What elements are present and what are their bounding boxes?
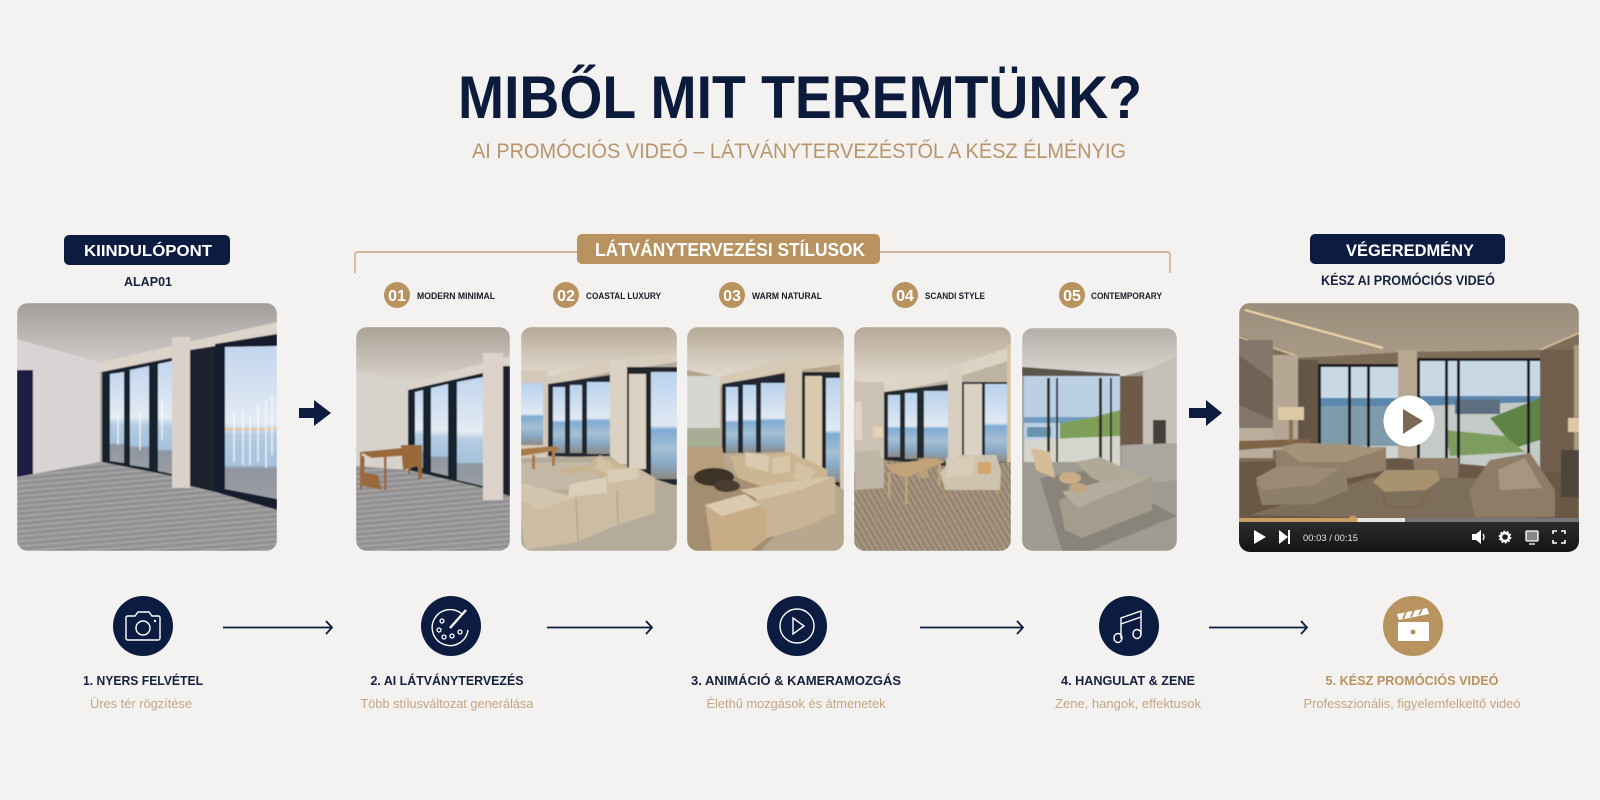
style label 02: 02 (557, 288, 575, 305)
progress bar (1239, 516, 1579, 522)
style label 02 (553, 282, 662, 308)
badge: kiindulópont (64, 235, 230, 265)
style label 04: SCANDI STYLE (925, 291, 985, 302)
title: MIBŐL MIT TEREMTÜNK? (458, 64, 1142, 131)
flow arrow 3 (920, 621, 1023, 634)
step 4 text (1055, 673, 1201, 711)
style label 04: 04 (896, 288, 914, 305)
video player (1239, 303, 1579, 552)
style label 03: 03 (723, 288, 741, 305)
label: alap01: ALAP01 (124, 274, 172, 289)
video frame image (1239, 303, 1579, 523)
style label 05: CONTEMPORARY (1091, 291, 1163, 302)
photo: coastal luxury (521, 327, 677, 551)
step 5 text (1304, 673, 1520, 711)
style label 05: 05 (1063, 288, 1081, 305)
style label 01 (384, 282, 495, 308)
step 2 text (360, 673, 534, 711)
style label 04 (892, 282, 985, 308)
badge: látványtervezési stílusok (577, 234, 880, 264)
photo: raw empty room (17, 303, 277, 551)
step 1 text: 1. NYERS FELVÉTEL (83, 673, 203, 688)
step 5 icon: clapperboard (1383, 596, 1443, 656)
step 5 text: 5. KÉSZ PROMÓCIÓS VIDEÓ (1326, 673, 1498, 688)
style label 02: COASTAL LUXURY (586, 291, 662, 302)
control bar (1239, 522, 1579, 552)
step 4 text: 4. HANGULAT & ZENE (1061, 673, 1195, 688)
play button (1384, 396, 1434, 446)
step 1 text: Üres tér rögzítése (90, 696, 192, 711)
step 3 text: 3. ANIMÁCIÓ & KAMERAMOZGÁS (691, 673, 901, 688)
arrow: styles to result (1189, 400, 1222, 426)
step 3 text: Élethű mozgások és átmenetek (706, 696, 886, 711)
step 5 text: Professzionális, figyelemfelkeltő videó (1304, 696, 1520, 711)
badge: látványtervezési stílusok: LÁTVÁNYTERVEZÉSI STÍLUSOK (595, 239, 866, 260)
badge: kiindulópont: KIINDULÓPONT (84, 242, 213, 260)
bracket: style group (355, 252, 1170, 273)
arrow: start to styles (299, 400, 331, 426)
step 4 icon: music note (1099, 596, 1159, 656)
step 1 text (83, 673, 203, 711)
label: kész ai promóciós videó: KÉSZ AI PROMÓCIÓS VIDEÓ (1321, 273, 1495, 288)
player controls: 00:03 / 00:15 (1303, 533, 1358, 544)
step 3 text (691, 673, 901, 711)
style label 03 (719, 282, 822, 308)
step 4 text: Zene, hangok, effektusok (1055, 696, 1201, 711)
step 2 icon: palette (421, 596, 481, 656)
subtitle: AI PROMÓCIÓS VIDEÓ – LÁTVÁNYTERVEZÉSTŐL A KÉSZ ÉLMÉNYIG (472, 140, 1126, 163)
style label 03: WARM NATURAL (752, 291, 822, 302)
step 2 text: Több stílusváltozat generálása (360, 696, 534, 711)
style label 05 (1059, 282, 1163, 308)
style label 01: 01 (388, 288, 406, 305)
photo: contemporary (1022, 328, 1177, 551)
step 3 icon: play (767, 596, 827, 656)
photo: scandi style (854, 327, 1011, 551)
flow arrow 2 (547, 621, 652, 634)
player controls (1254, 530, 1565, 544)
style label 01: MODERN MINIMAL (417, 291, 495, 302)
flow arrow 4 (1209, 621, 1307, 634)
step 2 text: 2. AI LÁTVÁNYTERVEZÉS (370, 673, 524, 688)
flow arrow 1 (223, 621, 332, 634)
photo: warm natural (687, 327, 844, 551)
photo: modern minimal (356, 327, 510, 551)
badge: végeredmény (1310, 234, 1505, 264)
badge: végeredmény: VÉGEREDMÉNY (1346, 241, 1474, 260)
step 1 icon: camera (113, 596, 173, 656)
